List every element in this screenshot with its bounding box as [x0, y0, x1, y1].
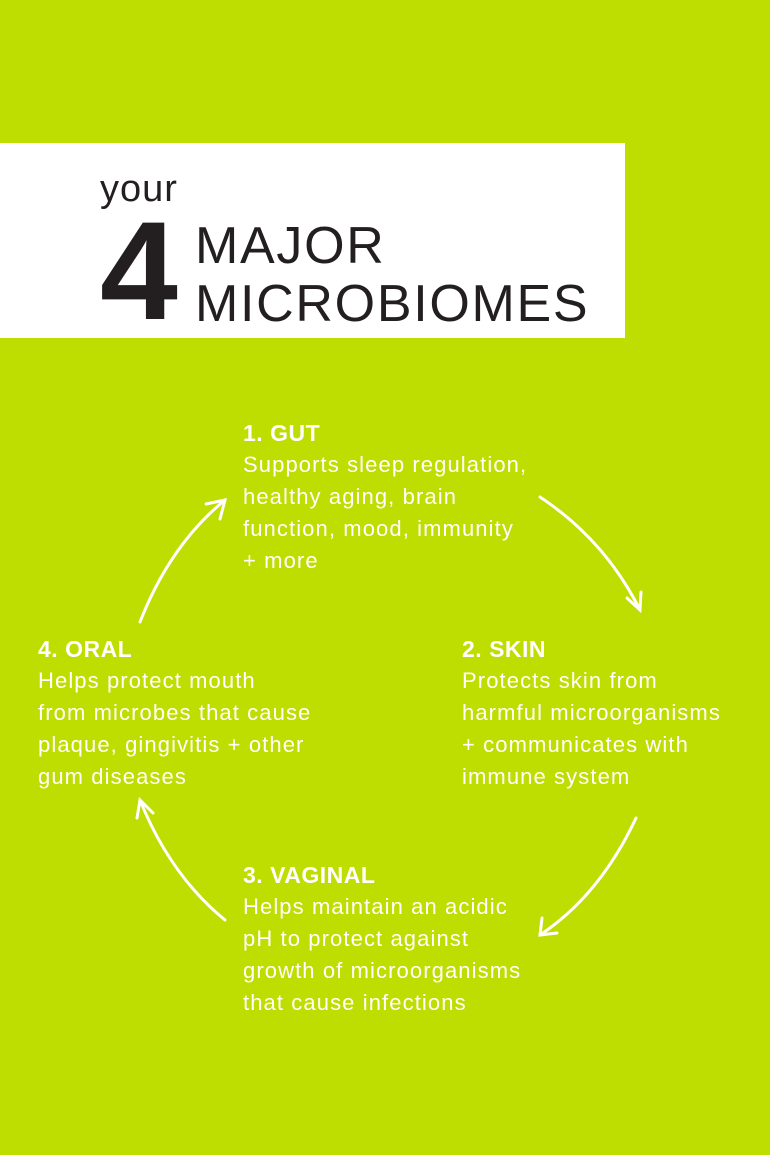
- title: big 4: 4: [100, 192, 178, 349]
- text: vaginal: 3. VAGINAL: [243, 862, 375, 888]
- title: major microbiomes: MICROBIOMES: [195, 275, 589, 333]
- text: oral: plaque, gingivitis + other: [38, 732, 304, 757]
- text: vaginal: pH to protect against: [243, 926, 469, 951]
- arrow: vaginal to oral: [137, 800, 225, 920]
- arrow: oral to gut: [140, 500, 225, 622]
- text: skin: Protects skin from: [462, 668, 658, 693]
- text: skin: 2. SKIN: [462, 636, 546, 662]
- text: gut: [243, 420, 527, 573]
- title: major microbiomes: MAJOR: [195, 217, 386, 275]
- text: vaginal: Helps maintain an acidic: [243, 894, 508, 919]
- text: gut: Supports sleep regulation,: [243, 452, 527, 477]
- text: gut: healthy aging, brain: [243, 484, 457, 509]
- text: gut: + more: [243, 548, 319, 573]
- text: oral: 4. ORAL: [38, 636, 132, 662]
- text: oral: Helps protect mouth: [38, 668, 256, 693]
- arrow: skin to vaginal: [540, 818, 636, 935]
- title panel: [0, 143, 625, 338]
- text: oral: from microbes that cause: [38, 700, 311, 725]
- text: oral: gum diseases: [38, 764, 187, 789]
- text: skin: + communicates with: [462, 732, 689, 757]
- arrow: gut to skin: [540, 497, 641, 610]
- text: vaginal: that cause infections: [243, 990, 467, 1015]
- text: gut: 1. GUT: [243, 420, 320, 446]
- text: vaginal: growth of microorganisms: [243, 958, 521, 983]
- text: gut: function, mood, immunity: [243, 516, 514, 541]
- title: major microbiomes: [195, 217, 589, 333]
- text: oral: [38, 636, 311, 789]
- text: skin: harmful microorganisms: [462, 700, 721, 725]
- title: your: your: [100, 168, 178, 210]
- text: skin: immune system: [462, 764, 630, 789]
- text: vaginal: [243, 862, 521, 1015]
- text: skin: [462, 636, 721, 789]
